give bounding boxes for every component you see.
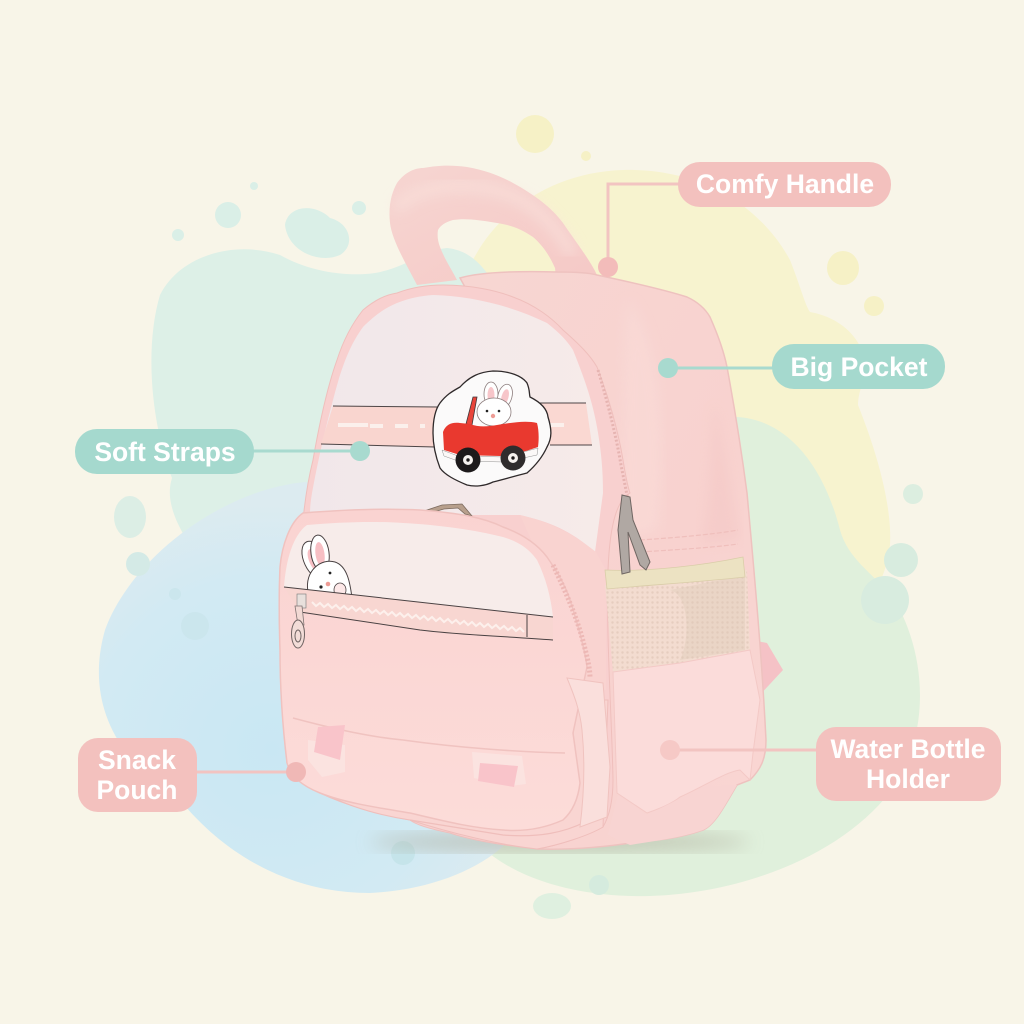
side fold shading — [620, 300, 662, 540]
ground shadow — [370, 832, 750, 852]
upper white panel — [310, 295, 603, 552]
car sticker — [433, 371, 551, 486]
back strap loop — [752, 640, 783, 697]
pocket rabbit — [297, 534, 352, 598]
label: Comfy Handle: Comfy Handle — [696, 169, 874, 199]
rabbit driver — [477, 382, 515, 426]
front pocket — [279, 509, 587, 831]
pocket white flap — [284, 522, 553, 617]
wheels — [456, 448, 480, 472]
windshield — [466, 397, 477, 425]
label: Soft Straps: Soft Straps — [94, 437, 236, 467]
label: Water Bottle Holder: Water Bottle — [830, 734, 986, 764]
label: Snack Pouch: Snack — [98, 745, 176, 775]
lower front layer — [287, 700, 608, 849]
background colour blobs — [99, 115, 923, 919]
label: Comfy Handle — [678, 162, 891, 207]
velcro loop left — [308, 725, 345, 777]
main zipper — [598, 370, 628, 500]
label: Water Bottle Holder: Holder — [866, 764, 950, 794]
backpack illustration — [279, 166, 783, 852]
pocket lower seam — [293, 718, 565, 753]
strap band right — [538, 403, 592, 445]
pocket stripe — [284, 587, 553, 640]
label: Snack Pouch: Pouch — [97, 775, 177, 805]
lower front side panel — [567, 678, 610, 827]
label: Water Bottle Holder — [816, 727, 1001, 801]
main zip pull — [424, 504, 472, 516]
front body — [279, 285, 630, 849]
connector lines — [195, 184, 818, 772]
lower side pouch — [613, 650, 760, 813]
metal clip — [618, 495, 650, 574]
label: Big Pocket — [772, 344, 945, 389]
marker dots — [286, 257, 680, 782]
pink area right of pocket — [520, 515, 606, 690]
mesh pocket — [605, 570, 750, 672]
pocket zip pull — [292, 594, 306, 648]
strap outlines — [321, 403, 592, 447]
mesh elastic band — [605, 557, 745, 589]
top handle — [389, 166, 597, 287]
pocket side zipper — [553, 565, 590, 678]
strap band left — [321, 406, 438, 447]
label: Big Pocket: Big Pocket — [791, 352, 928, 382]
label: Soft Straps — [75, 429, 254, 474]
stitched side seam — [640, 530, 738, 552]
bottom pale panel — [608, 785, 737, 845]
car body — [443, 422, 539, 456]
label: Snack Pouch — [78, 738, 197, 812]
side gusset — [460, 272, 766, 849]
velcro loop right — [472, 752, 526, 787]
